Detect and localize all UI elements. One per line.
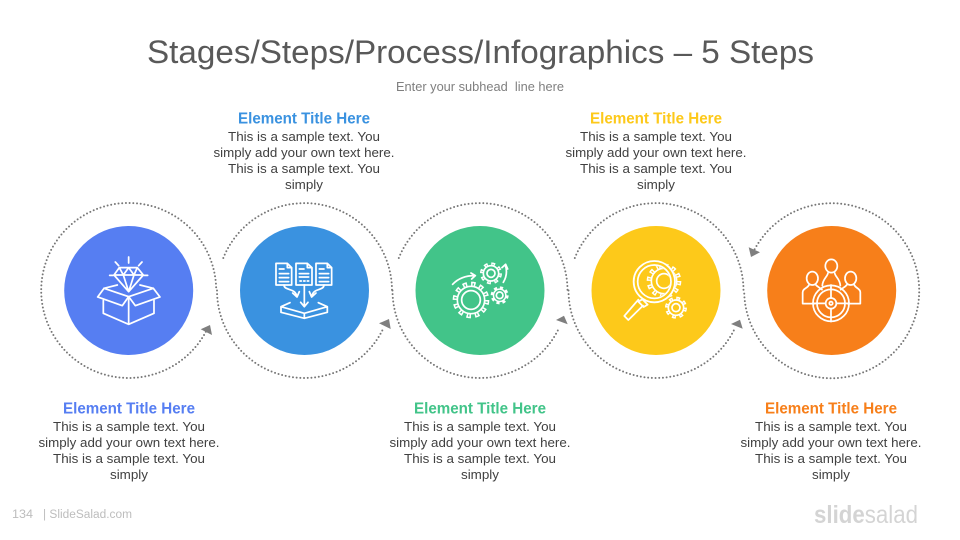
dotted connector rings [41,203,919,378]
icon: team and target [803,259,860,322]
text block: step 4: simply add your own text here. [566,145,746,160]
text block: step 5: Element Title Here [765,400,897,418]
text block: step 1 [38,400,220,482]
text block: step 5: simply [812,467,851,482]
title: Stages/Steps/Process/Infographics – 5 Steps [147,34,814,70]
text block: step 4: This is a sample text. You [580,161,732,176]
icon: documents into tray [276,263,332,318]
footer: page number and site: 134 [12,509,34,521]
icon: gears with arrows [453,264,508,316]
text block: step 5 [740,400,922,482]
text block: step 1: This is a sample text. You [53,451,205,466]
text block: step 5: This is a sample text. You [755,451,907,466]
icon: magnifier and gears [624,261,685,320]
icon: diamond in box [98,257,160,324]
text block: step 4: Element Title Here [590,110,722,128]
text block: step 2: simply add your own text here. [214,145,394,160]
text block: step 2: This is a sample text. You [228,129,380,144]
text block: step 5: This is a sample text. You [755,419,907,434]
circle: step 2 [240,226,369,355]
text block: step 1: Element Title Here [63,400,195,418]
circle: step 1 [64,226,193,355]
text block: step 4: This is a sample text. You [580,129,732,144]
text block: step 3: Element Title Here [414,400,546,418]
text block: step 3 [390,400,570,482]
circle: step 5 [767,226,896,355]
text block: step 1: This is a sample text. You [53,419,205,434]
text block: step 2: simply [285,177,324,192]
text block: step 5: simply add your own text here. [740,435,922,450]
footer: page number and site: | SlideSalad.com [43,509,132,521]
text block: step 4: simply [637,177,676,192]
arrowheads [201,247,760,335]
text block: step 2: This is a sample text. You [228,161,380,176]
circle: step 4 [592,226,720,355]
text block: step 3: This is a sample text. You [404,419,556,434]
footer: logo: slidesalad [814,501,918,529]
circle: step 3 [416,226,544,355]
text block: step 1: simply [110,467,149,482]
subtitle: Enter your subhead line here [396,80,564,94]
text block: step 1: simply add your own text here. [38,435,220,450]
text block: step 3: This is a sample text. You [404,451,556,466]
text block: step 3: simply [461,467,500,482]
text block: step 4 [566,110,746,192]
text block: step 2 [214,110,394,192]
text block: step 3: simply add your own text here. [390,435,570,450]
text block: step 2: Element Title Here [238,110,370,128]
